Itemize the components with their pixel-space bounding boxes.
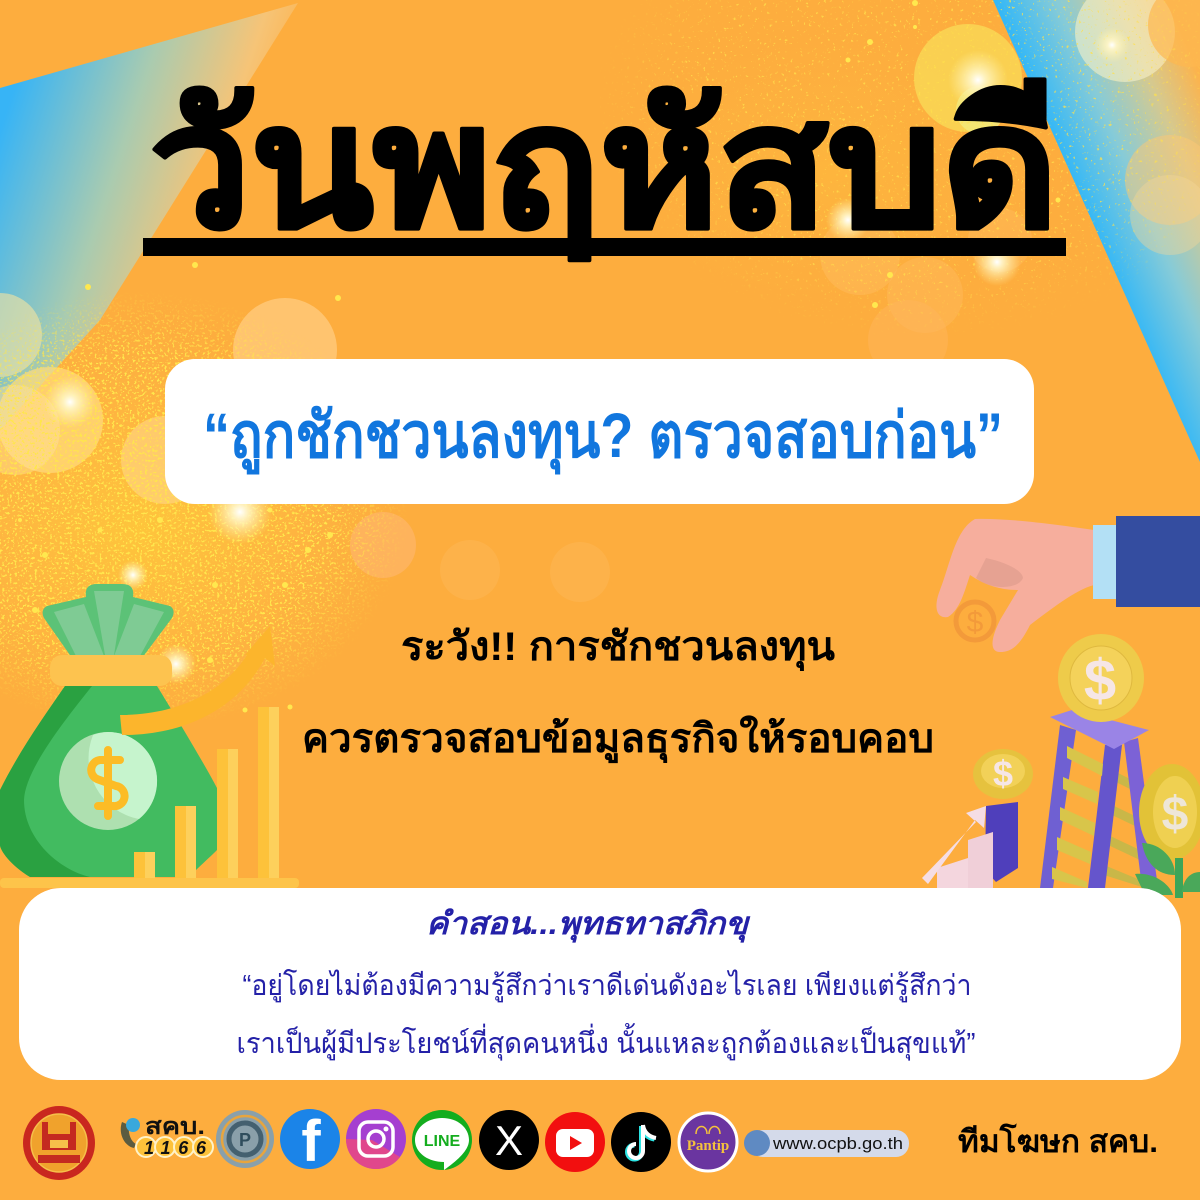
icon: instagram xyxy=(346,1109,406,1169)
website pill xyxy=(744,1130,909,1157)
coin xyxy=(956,602,994,640)
dollar sign xyxy=(91,750,125,816)
icon: facebook xyxy=(280,1109,340,1174)
icon: line: LINE xyxy=(424,1133,461,1150)
teaching quote: “อยู่โดยไม่ต้องมีความรู้สึกว่าเราดีเด่นดังอะไรเลย เพียงแต่รู้สึกว่า xyxy=(242,969,972,1003)
icon: ladder with coins and plant xyxy=(922,634,1200,898)
quote text: “ถูกชักชวนลงทุน? ตรวจสอบก่อน” xyxy=(203,401,1003,475)
coin xyxy=(59,732,157,830)
icon: ladder with coins and plant: $ xyxy=(1084,648,1116,713)
ladder rungs xyxy=(1052,746,1103,888)
icon: pantip: Pantip xyxy=(687,1138,729,1154)
bag top xyxy=(43,584,174,658)
background: star flares xyxy=(44,27,1130,684)
footer: logos row xyxy=(23,1106,909,1180)
logo: seal xyxy=(23,1106,95,1180)
icon: line xyxy=(412,1110,472,1170)
sleeve xyxy=(1116,516,1200,607)
right coin xyxy=(1139,764,1200,860)
logo: 1166 hotline xyxy=(121,1113,213,1158)
hotline digits: 1166 xyxy=(144,1138,207,1158)
icon: hand dropping coin xyxy=(936,516,1200,652)
logo: CPE: P xyxy=(239,1130,251,1150)
ladder top xyxy=(1050,710,1149,749)
logo: 1166 hotline: สคบ. xyxy=(145,1113,205,1139)
background: blue wedge top right xyxy=(993,0,1200,462)
background: gold glow xyxy=(0,0,1200,730)
title: วันพฤหัสบดี xyxy=(150,73,1058,263)
bag tie xyxy=(50,655,172,686)
icon: tiktok xyxy=(611,1112,671,1172)
icon: youtube xyxy=(545,1112,605,1172)
ladder legs xyxy=(1040,725,1076,888)
hand xyxy=(936,519,1094,652)
title underline xyxy=(143,238,1066,256)
back rungs xyxy=(1104,772,1145,888)
background: glitter xyxy=(0,0,1200,720)
teaching panel xyxy=(19,888,1181,1080)
icon: hand dropping coin: $ xyxy=(967,606,984,639)
quote panel xyxy=(165,359,1034,504)
chart bars xyxy=(134,852,155,882)
icon: pantip xyxy=(679,1113,737,1171)
icon: money bag with rising chart xyxy=(0,584,299,888)
website pill: www.ocpb.go.th xyxy=(772,1135,903,1153)
thumb shade xyxy=(976,558,1023,587)
small coin xyxy=(973,749,1033,799)
warning text: ควรตรวจสอบข้อมูลธุรกิจให้รอบคอบ xyxy=(302,715,934,764)
large coin xyxy=(1058,634,1144,722)
icon: ladder with coins and plant: $ xyxy=(1162,788,1189,841)
icon: x xyxy=(479,1110,539,1170)
background: sparkle dots xyxy=(18,0,1060,712)
bar chart arrow xyxy=(985,802,1018,882)
rising arrow xyxy=(120,626,275,735)
cuff xyxy=(1093,525,1116,599)
background: blue wedge top left xyxy=(0,3,298,430)
team credit: ทีมโฆษก สคบ. xyxy=(958,1123,1158,1159)
teaching heading: คำสอน...พุทธทาสภิกขุ xyxy=(426,906,751,943)
warning text: ระวัง!! การชักชวนลงทุน xyxy=(401,625,835,672)
teaching quote xyxy=(236,969,976,1061)
baseline xyxy=(0,878,299,888)
logo: CPE xyxy=(216,1110,274,1168)
teaching quote: เราเป็นผู้มีประโยชน์ที่สุดคนหนึ่ง นั้นแหละถูกต้องและเป็นสุขแท้” xyxy=(236,1023,976,1061)
warning text xyxy=(302,625,934,764)
icon: facebook: f xyxy=(301,1109,321,1174)
icon: x: X xyxy=(495,1117,523,1164)
bag body xyxy=(0,686,217,877)
plant xyxy=(1175,858,1183,898)
icon: ladder with coins and plant: $ xyxy=(993,753,1013,794)
